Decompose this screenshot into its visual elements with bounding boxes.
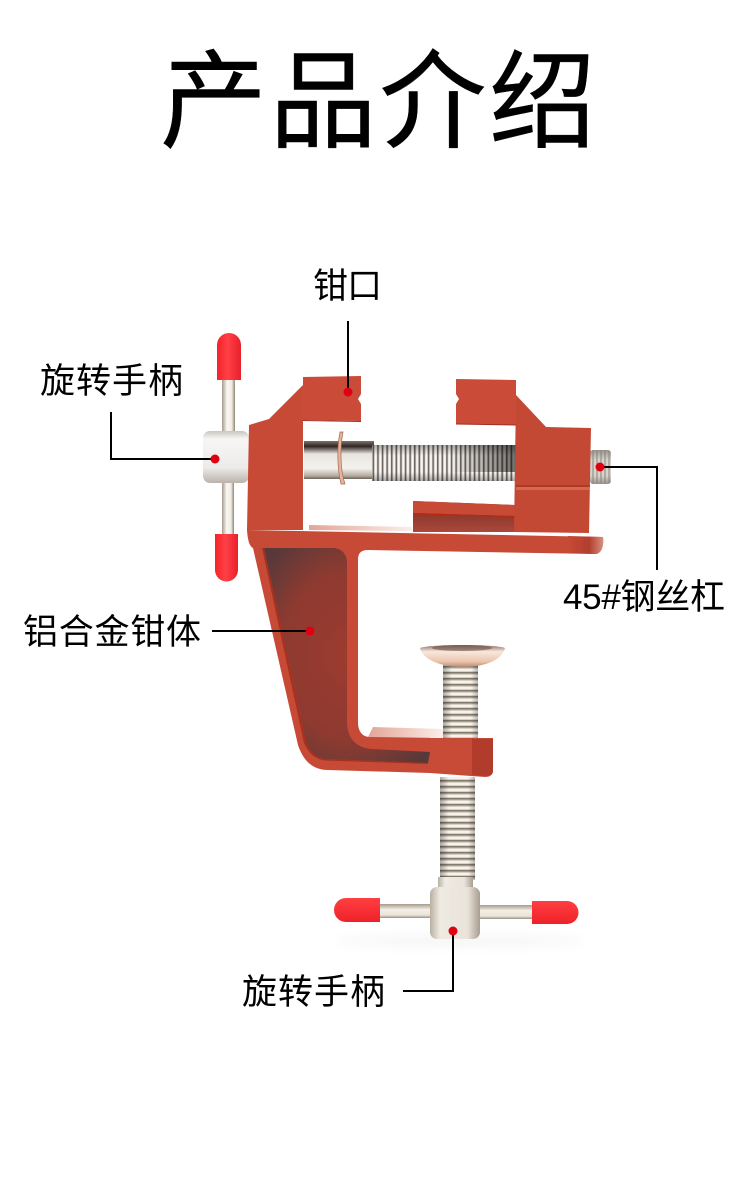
callout: 旋转手柄 bottom <box>242 926 458 1012</box>
title: 产品介绍 <box>160 42 596 162</box>
callout: 铝合金钳体: 铝合金钳体 <box>23 613 201 652</box>
callout: 钳口 <box>313 267 382 396</box>
callout: 铝合金钳体 <box>23 613 314 652</box>
callout: 旋转手柄 top <box>40 362 220 464</box>
callout: 45#钢丝杠: 45#钢丝杠 <box>563 578 725 617</box>
moving jaw <box>456 379 591 533</box>
fixed jaw <box>247 376 361 530</box>
ground shadow <box>335 937 585 945</box>
top handle <box>203 333 249 582</box>
bottom handle <box>334 877 578 939</box>
threaded screw <box>304 432 611 484</box>
callout: 45#钢丝杠 <box>563 462 725 617</box>
lower clamp screw <box>420 645 505 741</box>
callout: 钳口: 钳口 <box>313 267 382 306</box>
callout: 旋转手柄 top: 旋转手柄 <box>40 362 183 401</box>
callout: 旋转手柄 bottom: 旋转手柄 <box>242 973 385 1012</box>
bench vise product illustration <box>203 333 611 939</box>
C-clamp body <box>247 530 603 880</box>
slider block <box>309 501 515 532</box>
